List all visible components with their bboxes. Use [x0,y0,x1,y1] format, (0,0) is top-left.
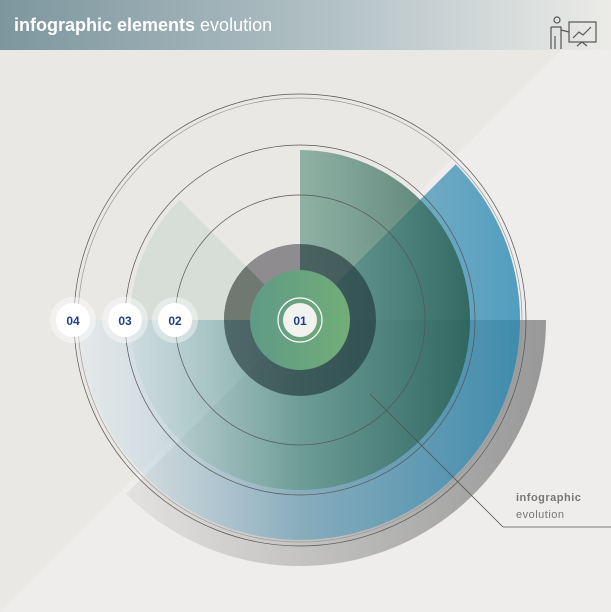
badge 04 [50,297,96,343]
gray shadow sector [126,320,546,566]
icon: presenter [551,17,596,49]
callout text: evolution [516,509,565,521]
light wedge upper left [130,200,300,320]
chart: radial evolution [50,94,611,566]
header bar [0,0,611,50]
badge 01: 01 [293,314,307,328]
badge 02: 02 [168,314,182,328]
thin rings [74,94,526,546]
green sector 03 [130,150,470,490]
badge 02 [152,297,198,343]
badge 03 [102,297,148,343]
leader line [370,394,611,527]
badge 04: 04 [66,314,80,328]
badge 01 [278,298,322,342]
dark ring [224,244,376,396]
blue sector 04 [80,164,520,540]
title: infographic elements evolution [14,15,272,35]
callout text: infographic [516,492,581,504]
badge 03: 03 [118,314,132,328]
inner circle [250,270,350,370]
callout text [516,492,581,521]
